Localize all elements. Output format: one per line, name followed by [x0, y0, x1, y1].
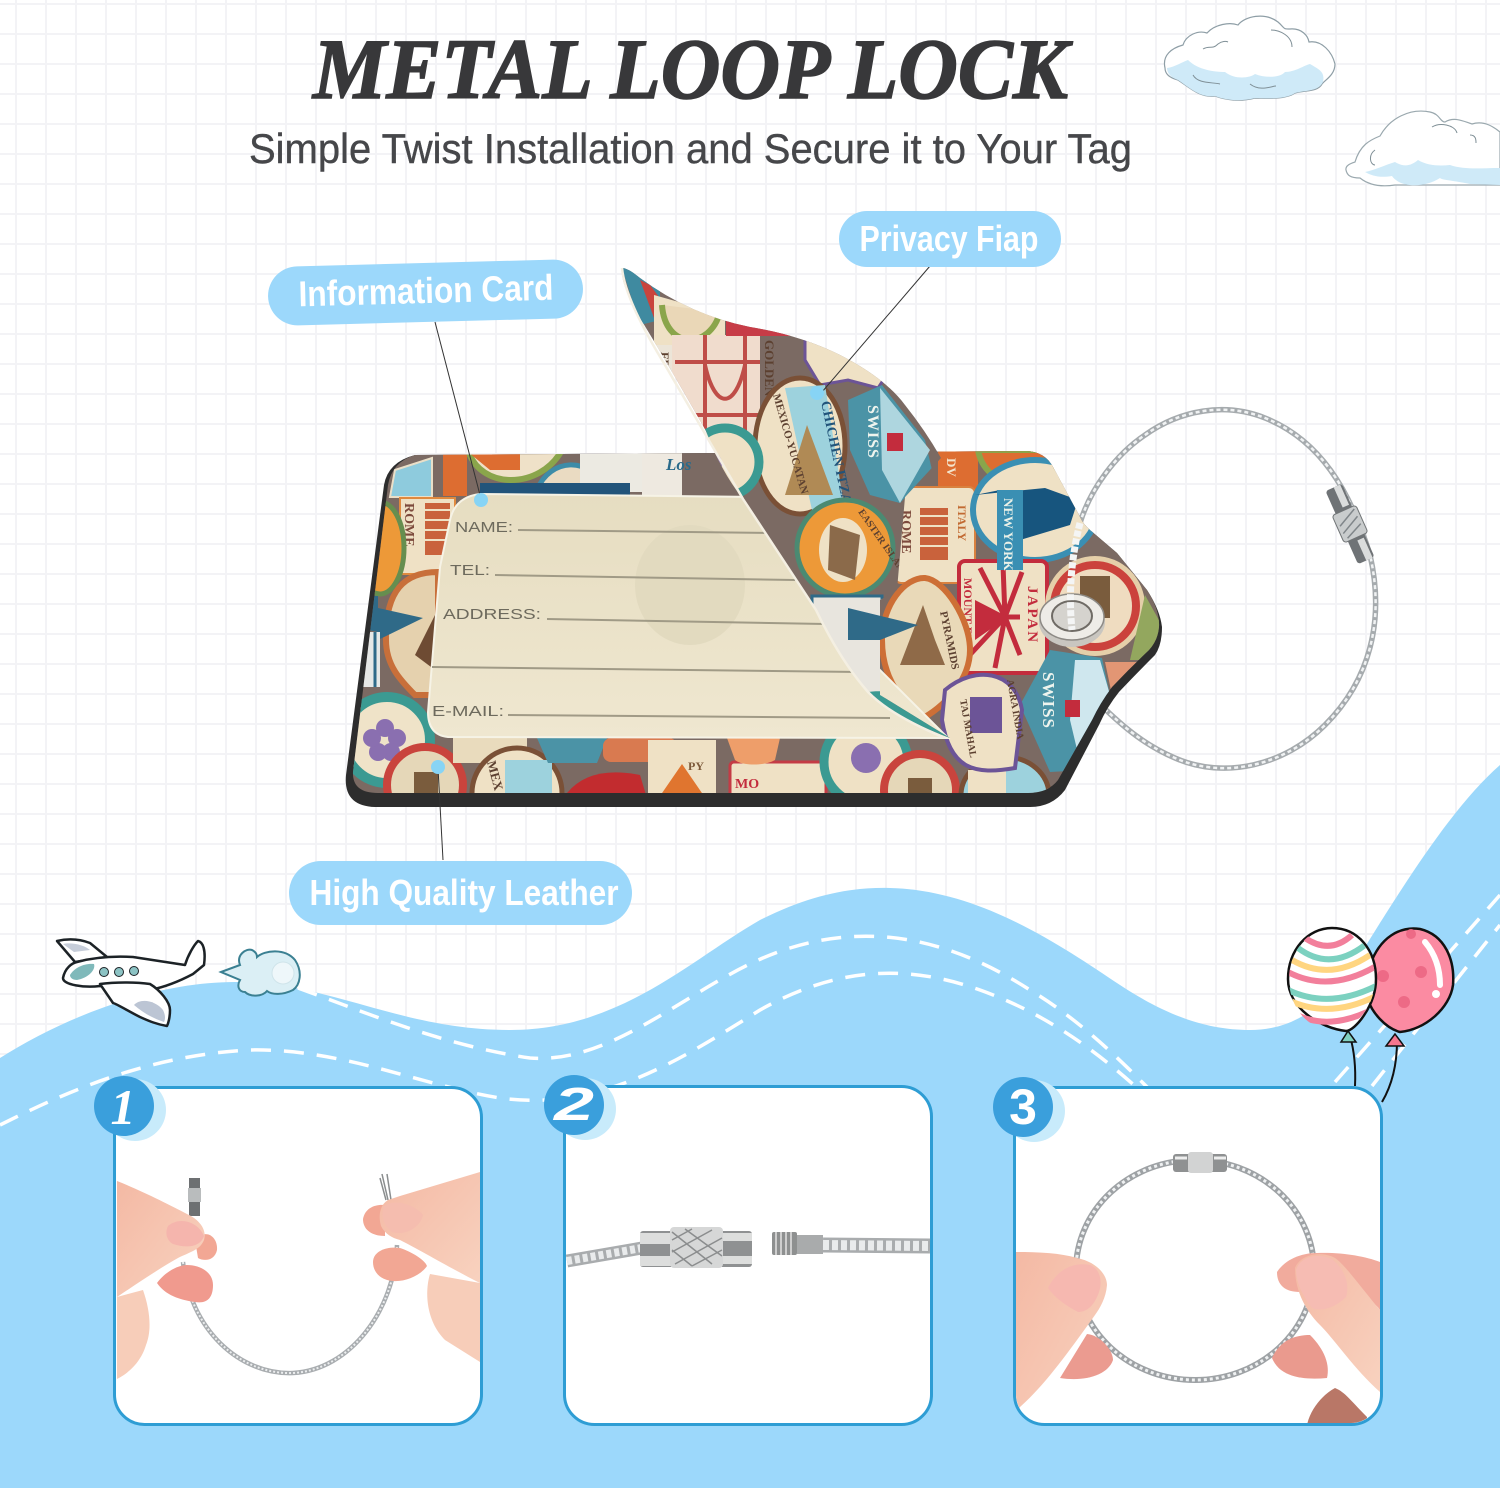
wire connector end — [188, 1178, 201, 1216]
window tonal patch — [635, 525, 745, 645]
left hand — [1016, 1252, 1113, 1425]
panel 2: thread the wire — [564, 1086, 932, 1424]
dashed flight paths — [0, 895, 1500, 1125]
tag stamp collage: ROME — [401, 503, 416, 547]
callout: high quality leather — [289, 760, 632, 925]
right hand — [1272, 1253, 1380, 1425]
callout: high quality leather: High Quality Leather — [310, 872, 618, 913]
flap highlight — [622, 268, 945, 738]
wire screw connector — [1322, 482, 1378, 566]
tag stamp collage — [352, 451, 1160, 793]
tag stamp collage: SWISS — [1039, 672, 1058, 729]
tag stamp collage: AGRA INDIA — [1004, 679, 1026, 741]
callout: privacy flap: Privacy Fiap — [860, 218, 1038, 259]
form label: address: ADDRESS: — [443, 606, 541, 623]
luggage tag — [340, 260, 1170, 838]
tag stamp collage: ITALY — [955, 505, 969, 541]
tag stamp collage: DV — [944, 458, 959, 477]
ring connector — [1173, 1152, 1227, 1173]
tag stamp collage: JAPAN — [1024, 586, 1040, 644]
privacy flap: FRA — [658, 352, 672, 377]
icon: airplane — [57, 940, 205, 1026]
wire over eyelet — [1070, 523, 1080, 630]
tag dark edge — [346, 451, 1162, 807]
privacy flap: GOLDEN — [762, 340, 777, 397]
badge: step 2 — [544, 1075, 616, 1140]
tag stamp collage: Los — [665, 455, 692, 474]
privacy flap: CHICHEN ITZA — [817, 400, 854, 506]
privacy flap: SWISS — [864, 405, 881, 459]
right stamps — [938, 450, 978, 492]
badge: step 3: 3 — [1009, 1079, 1037, 1135]
closed wire ring — [1076, 1160, 1314, 1380]
title: METAL LOOP LOCK — [311, 21, 1073, 117]
panel 3: closed wire loop — [1014, 1088, 1382, 1425]
connector barrel — [640, 1227, 752, 1268]
callout: information card — [267, 259, 584, 507]
metal eyelet — [1039, 594, 1105, 647]
callout: information card: Information Card — [298, 267, 554, 314]
wire arc — [183, 1245, 397, 1373]
blue wave background — [0, 765, 1500, 1488]
privacy flap: EASTER ISLAND — [856, 507, 911, 580]
subtitle: Simple Twist Installation and Secure it to Your Tag — [249, 125, 1132, 172]
tag stamp collage: MO — [735, 777, 759, 792]
tag stamp collage: PYRAMIDS — [937, 610, 961, 671]
icon: cloud right — [1346, 111, 1500, 186]
information window — [428, 494, 948, 738]
form label: e-mail: E-MAIL: — [432, 703, 504, 720]
badge: step 2: 2 — [552, 1078, 595, 1130]
left stamps — [390, 458, 432, 497]
callout: privacy flap — [810, 211, 1061, 400]
panel 1: open the wire loop — [114, 1088, 482, 1424]
form label: tel: TEL: — [450, 562, 490, 579]
tag stamp collage: TAJ MAHAL — [957, 699, 978, 759]
left wire — [567, 1248, 642, 1261]
right wire — [823, 1245, 930, 1246]
badge: step 1 — [94, 1076, 166, 1141]
right hand — [363, 1172, 480, 1362]
tag stamp collage: MEX — [484, 759, 507, 793]
tag stamp collage: ROME — [898, 510, 913, 554]
badge: step 1: 1 — [110, 1079, 136, 1135]
privacy flap — [610, 260, 955, 750]
window form lines — [432, 530, 890, 718]
tag stamp collage: NEW YORK — [1001, 498, 1016, 571]
balloon: pink — [1368, 929, 1453, 1102]
clock tower spire — [848, 608, 918, 640]
form label: name: NAME: — [455, 519, 513, 536]
badge: step 3 — [993, 1077, 1065, 1142]
threaded end — [772, 1232, 823, 1255]
balloon: striped — [1288, 928, 1378, 1086]
wire loop on tag — [1070, 410, 1376, 768]
wire tip — [380, 1174, 391, 1200]
tag stamp collage: PY — [688, 759, 704, 773]
icon: cloud top — [1164, 16, 1335, 100]
privacy flap: MEXICO-YUCATAN — [770, 393, 810, 495]
left hand — [117, 1181, 217, 1379]
tag stamp collage: MOUNT FUJI — [961, 578, 975, 654]
icon: plane exhaust puff — [221, 950, 300, 996]
